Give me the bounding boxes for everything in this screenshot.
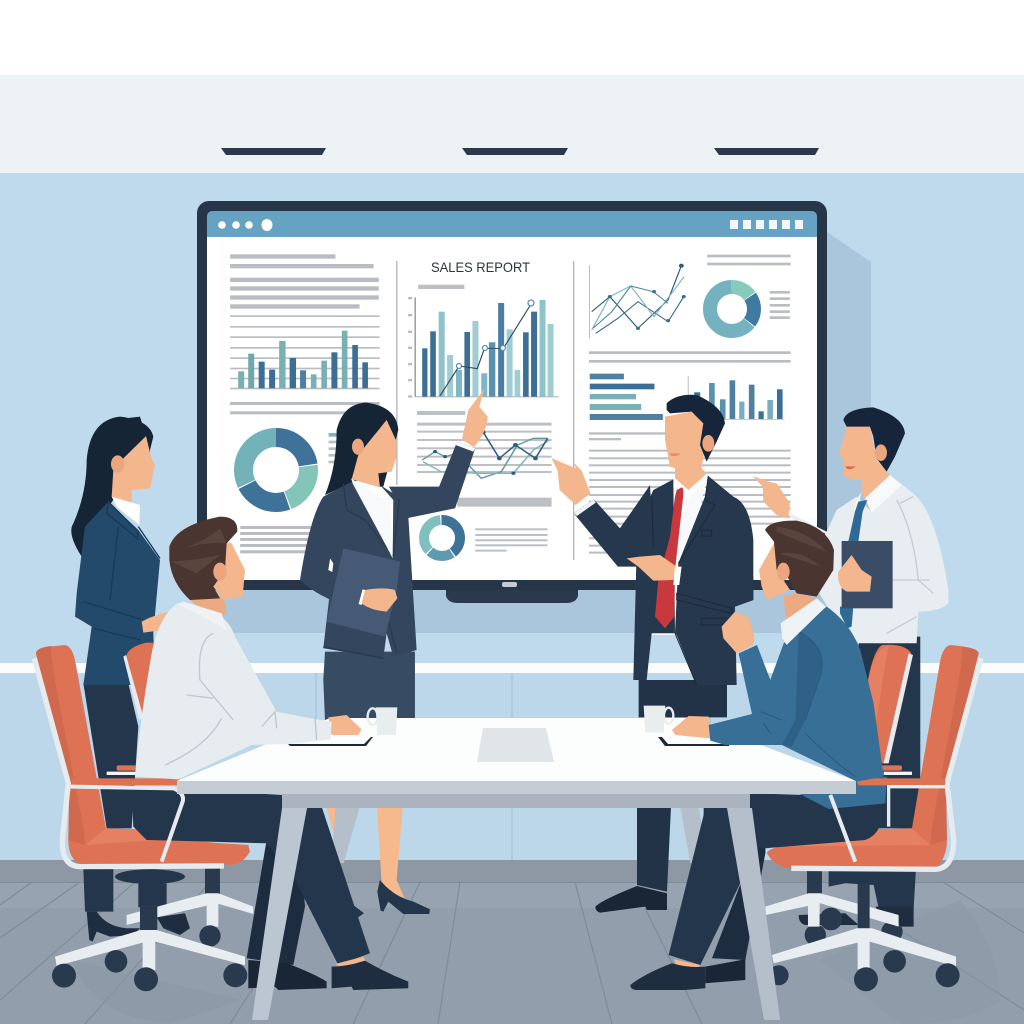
right tablet xyxy=(658,737,729,746)
right man pointing hand xyxy=(753,476,790,518)
presenter man collar xyxy=(673,473,707,498)
presenter man neck and face xyxy=(665,412,707,492)
far leg xyxy=(247,833,305,965)
chair armrests xyxy=(71,778,945,862)
presenter woman blouse xyxy=(351,478,393,560)
presenter man sleeve xyxy=(574,485,654,567)
near shoe xyxy=(332,961,408,990)
presentation screen xyxy=(197,201,827,590)
presenter man right sleeve xyxy=(678,567,753,607)
left man hair xyxy=(169,517,237,600)
table underside xyxy=(282,794,750,808)
middle heading bar xyxy=(418,285,464,289)
left chair cushion xyxy=(36,645,250,865)
presenter woman legs xyxy=(325,800,407,903)
presenter woman heel xyxy=(377,880,430,914)
left chair star base xyxy=(55,930,245,970)
horizontal bar chart xyxy=(590,374,663,420)
right chair cushion xyxy=(767,645,979,868)
standing man right xyxy=(753,407,948,927)
presenter woman folder xyxy=(327,548,400,637)
right chair rear base xyxy=(765,870,899,927)
near shoe xyxy=(630,963,705,990)
screen shadow on wall xyxy=(197,232,871,633)
presenter man tie xyxy=(655,487,683,628)
far leg xyxy=(712,820,765,960)
ankle xyxy=(674,959,700,968)
presenter man jacket xyxy=(620,476,753,685)
left man face xyxy=(213,540,245,600)
table leg right xyxy=(727,808,780,1020)
right man ear xyxy=(875,444,887,461)
middle donut chart xyxy=(424,520,460,556)
monitor button xyxy=(502,582,517,587)
right man neck and face xyxy=(839,427,890,511)
presenter woman pointing hand xyxy=(462,389,488,447)
presenter woman xyxy=(300,389,488,917)
right man ear xyxy=(777,563,790,581)
column dividers xyxy=(397,261,574,560)
seated man right upper body xyxy=(672,521,884,782)
presenter man trousers xyxy=(637,680,765,892)
right line chart xyxy=(589,264,686,338)
right man sweater xyxy=(709,607,884,782)
ceiling lights xyxy=(221,148,819,155)
monitor stand xyxy=(446,590,578,603)
inner chair left xyxy=(107,643,160,775)
presenter woman hair xyxy=(325,403,398,495)
left woman trousers xyxy=(83,683,167,912)
right chair star base xyxy=(772,928,956,969)
left woman collar xyxy=(112,497,140,525)
right man book xyxy=(842,541,893,608)
left woman hand xyxy=(142,611,176,633)
seated man right lower body xyxy=(630,777,887,990)
right column bar chart xyxy=(688,376,785,420)
presenter man xyxy=(552,395,765,913)
left woman ear xyxy=(111,455,124,473)
left bar chart xyxy=(238,331,368,388)
conference table xyxy=(177,718,856,1020)
presenter man pointing hand xyxy=(552,458,591,505)
right man neck xyxy=(783,593,817,620)
seated man left lower body xyxy=(132,787,408,990)
middle tangled line chart xyxy=(422,430,550,478)
right man tie xyxy=(840,500,867,628)
left woman hair front xyxy=(110,417,146,457)
middle lines xyxy=(417,411,552,552)
table top xyxy=(177,718,856,781)
top right donut chart xyxy=(710,287,754,331)
table leg left xyxy=(252,808,307,1020)
left woman face xyxy=(112,436,155,513)
right man collar xyxy=(781,598,826,645)
presenter woman face xyxy=(352,420,397,487)
left column text lines xyxy=(230,254,380,553)
right chair stem xyxy=(858,882,870,932)
far shoe xyxy=(705,959,745,983)
left woman jacket xyxy=(75,502,160,685)
left man collar xyxy=(178,602,227,630)
presenter man shirt xyxy=(652,473,708,635)
right man mouth xyxy=(845,466,856,469)
left man hand xyxy=(328,715,362,735)
presenter woman left arm xyxy=(300,497,365,612)
back table legs xyxy=(332,807,709,867)
left chair rear base xyxy=(127,868,253,947)
right man shoes xyxy=(799,907,914,927)
presenter man mouth xyxy=(669,453,681,456)
presenter woman ear xyxy=(352,439,364,455)
office chair right xyxy=(765,645,981,991)
paper on table xyxy=(477,728,554,762)
wall rail xyxy=(0,663,1024,673)
left woman shoes xyxy=(87,912,190,942)
right man trousers xyxy=(829,637,920,908)
left man ear xyxy=(213,563,227,581)
table edge xyxy=(177,781,856,794)
ankle xyxy=(335,957,367,968)
left man shirt xyxy=(135,603,332,779)
presenter man ear xyxy=(702,435,714,452)
left coffee mug xyxy=(368,707,397,735)
right coffee mug xyxy=(644,706,673,733)
sales report title: SALES REPORT xyxy=(431,259,530,275)
presenter woman cuff and hand xyxy=(359,589,365,605)
window dots xyxy=(218,219,272,231)
office chair left xyxy=(34,645,253,991)
middle bar chart xyxy=(408,297,559,398)
left man neck xyxy=(190,597,227,617)
presenter woman skirt xyxy=(323,652,415,720)
right man collar xyxy=(853,475,902,513)
right chair rear casters xyxy=(805,908,903,946)
chart markers xyxy=(456,300,534,368)
right man fist xyxy=(722,612,754,653)
sweater hem xyxy=(799,777,887,809)
left woman hair back xyxy=(71,417,153,557)
standing woman left xyxy=(71,417,190,942)
screen content scaled group xyxy=(230,254,791,560)
right man shirt xyxy=(790,475,948,643)
right chair casters xyxy=(769,950,960,991)
right man hand xyxy=(672,716,710,738)
right chair frame xyxy=(791,658,981,869)
left chair seat underside xyxy=(115,869,185,884)
window squares xyxy=(730,220,803,229)
right man hair xyxy=(843,407,905,472)
presenter man shoe xyxy=(595,886,667,913)
thigh and near leg xyxy=(132,787,370,965)
right man hair xyxy=(765,521,834,597)
right column lines xyxy=(589,255,791,554)
right chair seat underside xyxy=(830,869,900,884)
right man face xyxy=(759,542,790,600)
presenter woman raised arm xyxy=(389,442,475,518)
left donut chart xyxy=(244,438,308,502)
presenter woman other shoe xyxy=(353,905,364,917)
presenter man hair xyxy=(667,395,725,462)
presenter man lower hand xyxy=(627,555,677,581)
seated man left upper body xyxy=(135,517,362,779)
left chair stem xyxy=(140,905,157,932)
inner chair right xyxy=(868,645,913,775)
left chair frame xyxy=(34,658,224,867)
far shoe xyxy=(248,960,327,990)
thigh and near leg xyxy=(669,793,884,965)
left chair casters xyxy=(52,950,247,991)
presenter woman jacket xyxy=(323,482,417,658)
left tablet xyxy=(288,737,373,746)
right man holding hand xyxy=(838,555,872,592)
